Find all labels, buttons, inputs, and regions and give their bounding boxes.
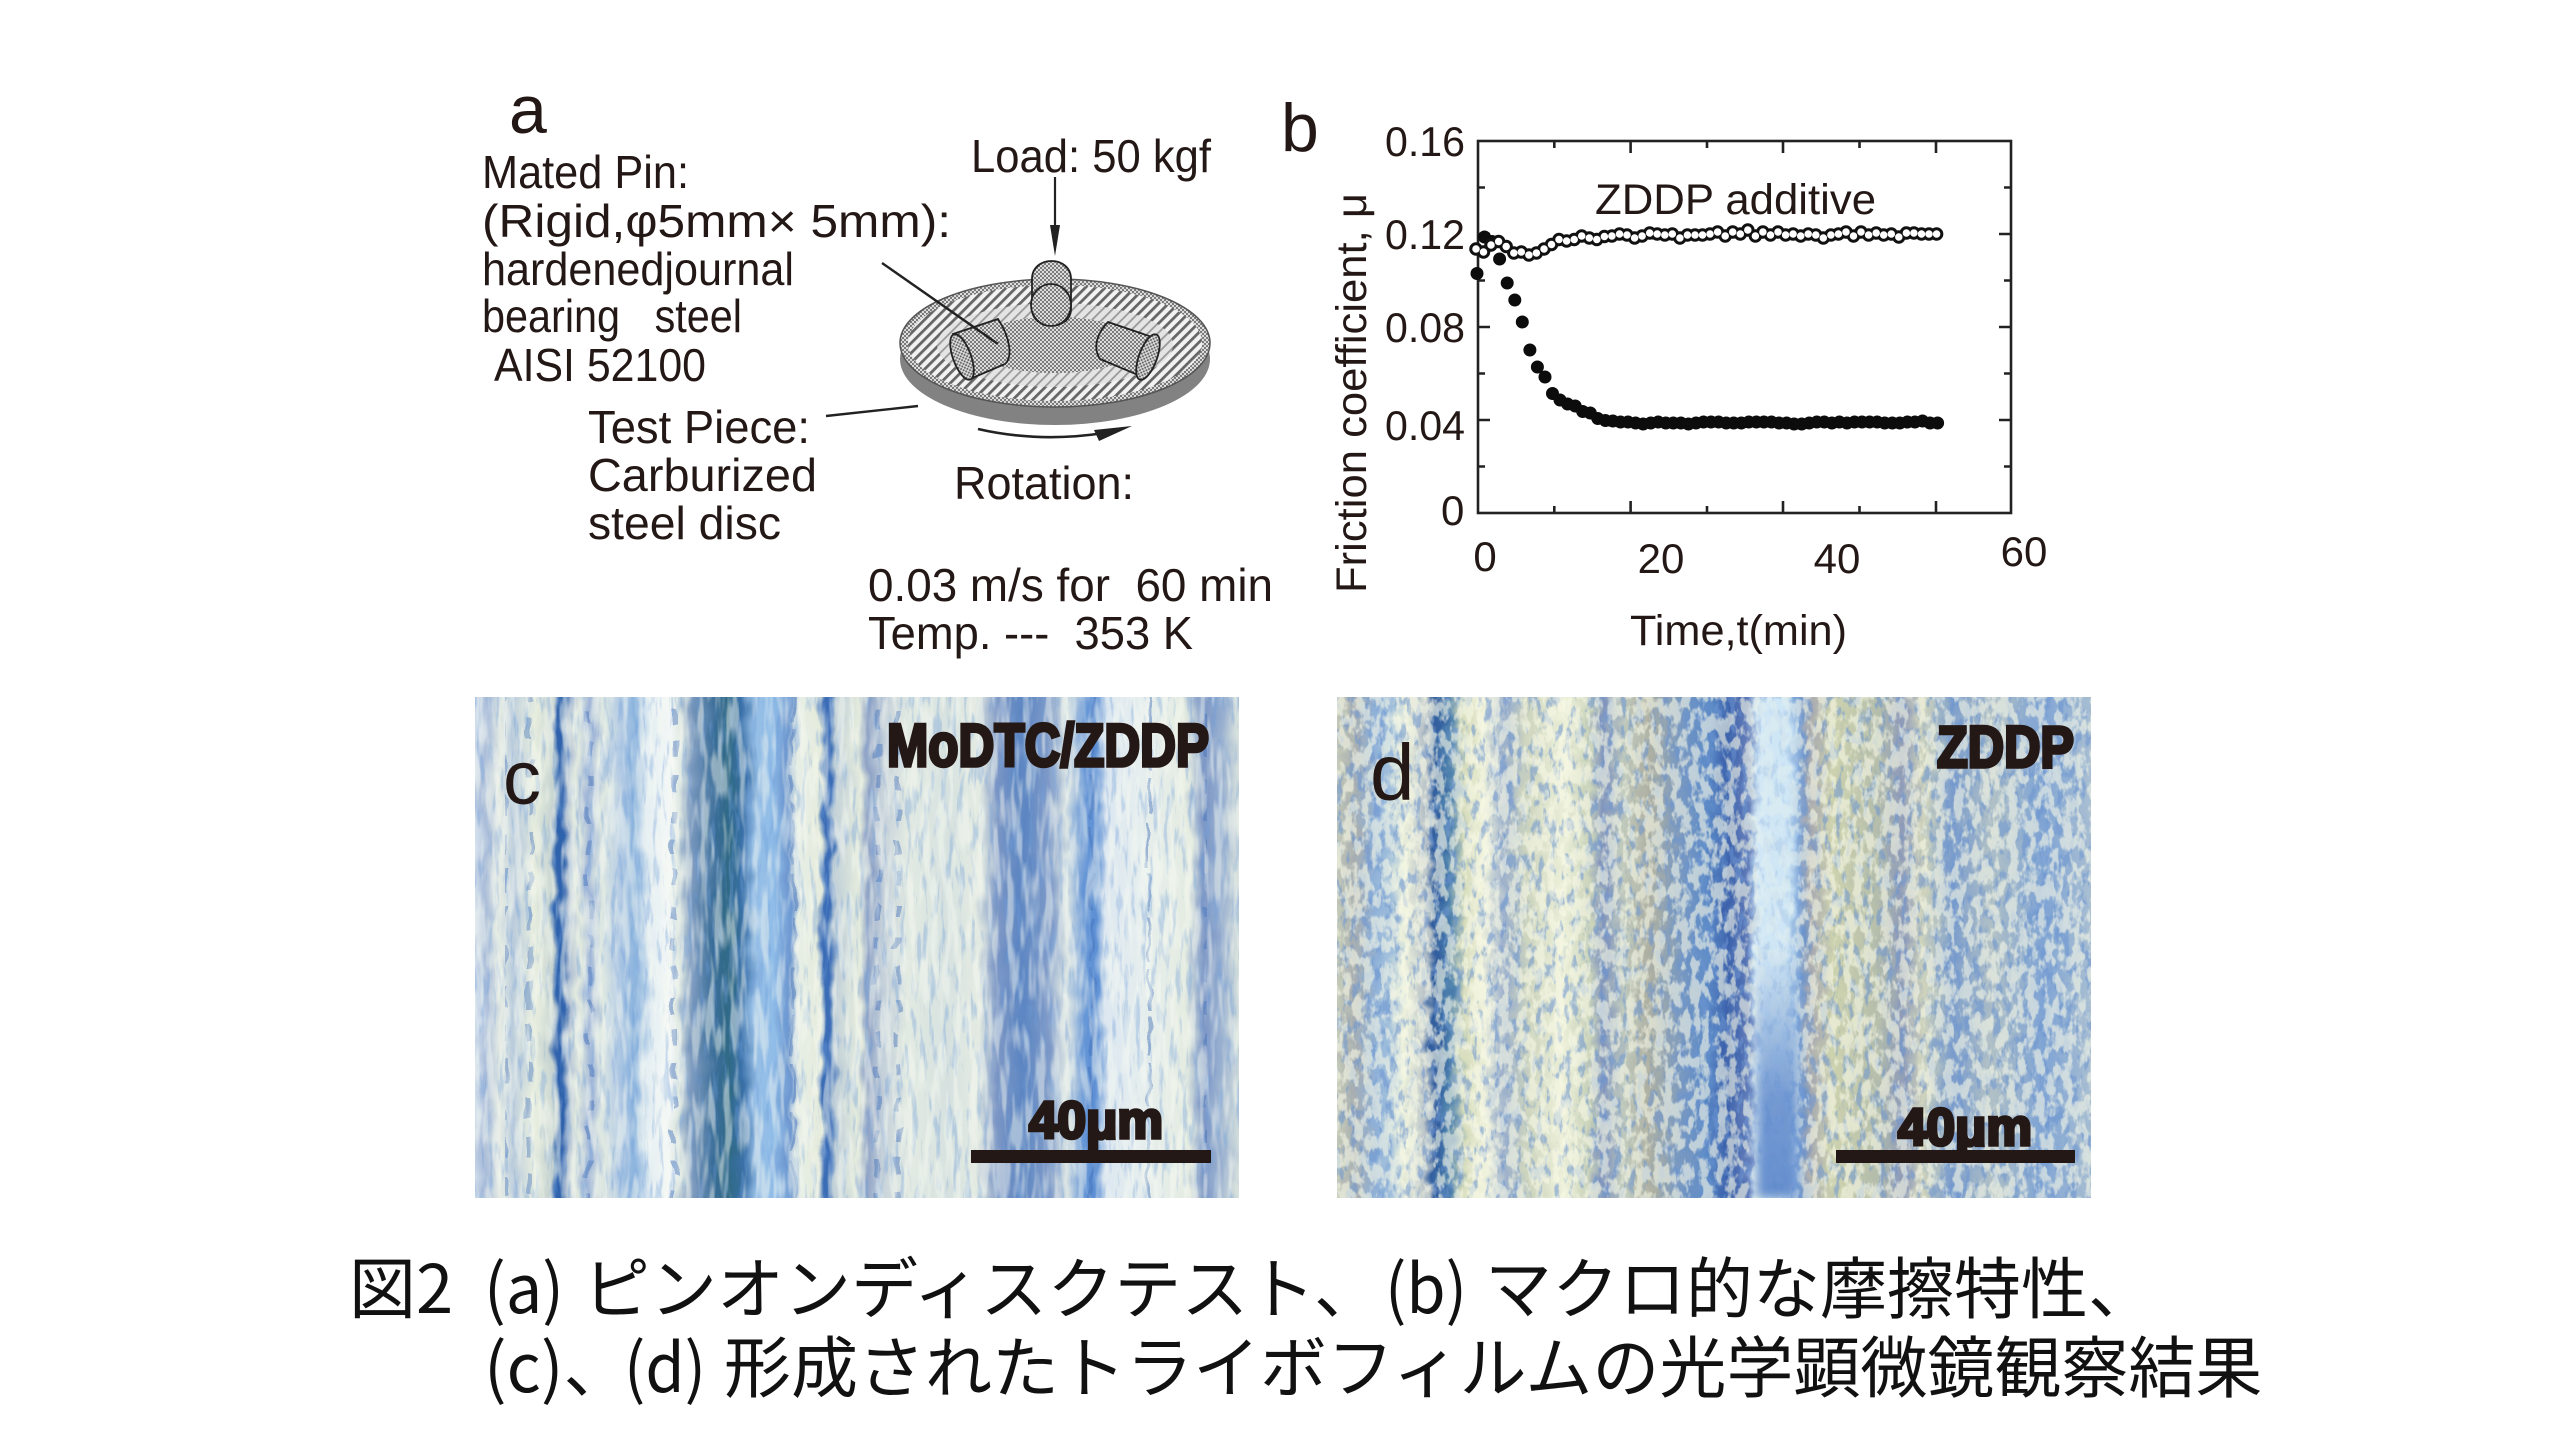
chart frame and ticks (1478, 141, 2011, 513)
label: mated pin: Mated Pin: (482, 146, 689, 198)
label: mated pin: AISI 52100 (494, 339, 706, 391)
y axis tick labels: 0.04 (1385, 402, 1465, 449)
panel letter d: d (1370, 728, 1414, 817)
y axis tick labels: 0.16 (1385, 118, 1465, 165)
label: rotation: Rotation: (954, 457, 1134, 509)
leader line: test piece (826, 406, 918, 416)
caption: line 1 (484, 1236, 2155, 1333)
caption: line 1: ピンオンディスクテスト、 (583, 1236, 1381, 1333)
x axis title: Time,t(min) (1630, 607, 1847, 655)
panel a: pin-on-disc test schematic (482, 72, 1273, 659)
panel letter b: b (1281, 90, 1319, 166)
y axis tick labels: 0.08 (1385, 304, 1465, 351)
label: test conditions (868, 559, 1273, 659)
micrograph texture c (475, 697, 1239, 1198)
x axis tick labels (1473, 528, 2047, 582)
caption: line 1: マクロ的な摩擦特性、 (1485, 1236, 2155, 1333)
x axis tick labels: 40 (1814, 535, 1860, 582)
label: mated pin: (Rigid,φ5mm× 5mm): (482, 195, 951, 247)
label: test piece (588, 401, 817, 549)
x axis tick labels: 20 (1638, 535, 1684, 582)
y axis tick labels: 0.12 (1385, 211, 1465, 258)
panel d: ZDDP micrograph (1337, 697, 2091, 1198)
label: test piece: steel disc (588, 497, 781, 549)
caption: line 2: (c)、 (484, 1315, 630, 1412)
series: ZDDP additive open markers (1476, 230, 1937, 255)
arrow: rotation (978, 426, 1132, 441)
label: mated pin: hardenedjournal (482, 243, 794, 295)
caption: line 2: (d) (624, 1315, 706, 1412)
y axis title: Friction coefficient, μ (1328, 193, 1376, 593)
label: load: Load: 50 kgf (971, 130, 1211, 182)
scale bar d (1836, 1099, 2075, 1163)
caption (349, 1236, 2262, 1412)
pin: right (1096, 322, 1165, 383)
label: test piece: Carburized (588, 449, 817, 501)
scale bar c: 40μm (1029, 1092, 1163, 1150)
caption: figure number: 図2 (349, 1236, 453, 1333)
disc with pins (900, 261, 1210, 425)
y axis tick labels (1385, 118, 1465, 534)
x axis tick labels: 0 (1473, 533, 1497, 580)
label: test conditions: 0.03 m/s for 60 min (868, 559, 1273, 611)
micrograph texture d (1337, 697, 2091, 1198)
leader line: pin (882, 263, 998, 344)
caption: line 2: 形成されたトライボフィルムの光学顕微鏡観察結果 (724, 1315, 2262, 1412)
arrow: load (1050, 177, 1060, 256)
caption: line 1: (a) (484, 1236, 564, 1333)
pin: top (1031, 261, 1071, 326)
label: ZDDP: ZDDP (1937, 715, 2074, 780)
label: MoDTC/ZDDP: MoDTC/ZDDP (887, 712, 1209, 779)
y axis tick labels: 0 (1441, 487, 1464, 534)
panel letter c: c (503, 736, 541, 821)
caption: line 1: (b) (1385, 1236, 1467, 1333)
x axis tick labels: 60 (2001, 528, 2047, 575)
panel letter a: a (509, 72, 547, 148)
pin: left (945, 319, 1009, 383)
label: test piece: Test Piece: (588, 401, 810, 453)
scale bar d: 40μm (1898, 1099, 2032, 1157)
label: mated pin: bearing steel (482, 290, 742, 342)
series: MoDTC/ZDDP filled markers (1477, 237, 1938, 424)
label: mated pin (482, 146, 951, 391)
panel c: MoDTC/ZDDP micrograph (475, 697, 1239, 1198)
label: test conditions: Temp. --- 353 K (868, 607, 1193, 659)
series label: ZDDP additive: ZDDP additive (1595, 176, 1876, 224)
panel b: friction coefficient chart (1281, 90, 2047, 655)
scale bar c (971, 1092, 1211, 1163)
